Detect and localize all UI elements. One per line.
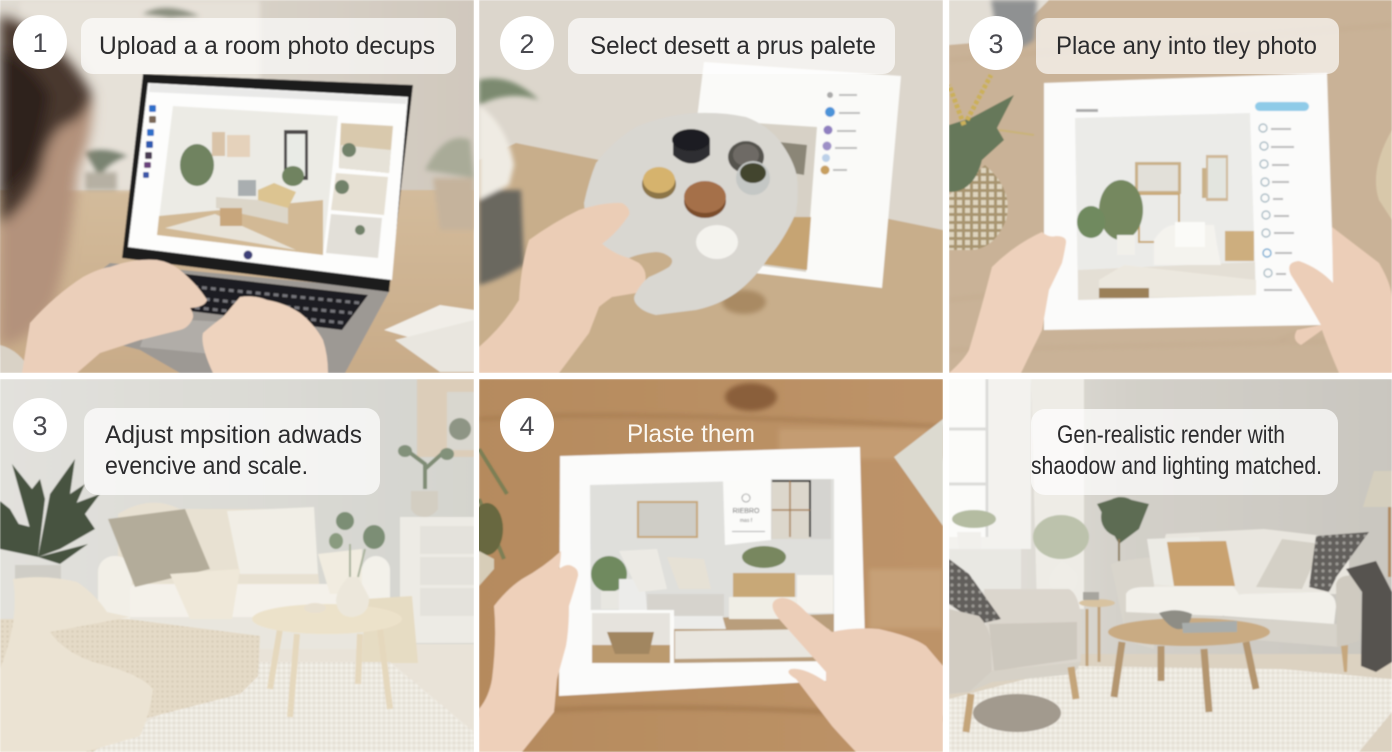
sheet header bbox=[1076, 102, 1309, 112]
white dresser bbox=[400, 517, 474, 643]
book at top right bbox=[894, 419, 943, 526]
paint palette bbox=[584, 113, 798, 315]
blurred background plants and pots bbox=[20, 0, 474, 230]
caption pill bbox=[84, 408, 380, 495]
step number badge bbox=[969, 16, 1023, 70]
round coffee table with bowl and books bbox=[1108, 610, 1270, 712]
scene: person using laptop bbox=[0, 0, 474, 373]
shaggy rug bbox=[949, 666, 1392, 752]
wall background bbox=[0, 0, 474, 200]
step number badge bbox=[13, 15, 67, 69]
step number badge: 3 bbox=[988, 29, 1004, 59]
caption pill bbox=[1031, 409, 1338, 495]
hands on the keyboard bbox=[22, 260, 328, 373]
collage white note card with text: RIEBRO bbox=[733, 508, 760, 515]
scene: hand holding paint palette bbox=[479, 0, 943, 373]
collage basket photo bbox=[590, 610, 674, 665]
grey floor pouf bbox=[973, 694, 1061, 732]
sheet tool list labels bbox=[1264, 128, 1294, 291]
caption pill: Place any into tley photo bbox=[1056, 32, 1317, 60]
collage window photo bbox=[771, 479, 831, 539]
woven basket right bbox=[1376, 130, 1392, 220]
floor lamp bbox=[1363, 471, 1392, 577]
sheet tool list bbox=[1259, 124, 1272, 277]
scene: hands placing collage bbox=[471, 379, 943, 752]
step number badge: 1 bbox=[32, 28, 48, 58]
shoulder bbox=[0, 344, 24, 373]
white heading text: Plaste them bbox=[627, 420, 755, 448]
framed art bbox=[417, 379, 474, 457]
scene: hands holding printed sheet bbox=[949, 0, 1392, 373]
printed sheet bbox=[1044, 73, 1334, 330]
caption pill: evencive and scale. bbox=[105, 452, 308, 480]
caption pill: Upload a a room photo decups bbox=[99, 32, 435, 60]
left hand holding sheet bbox=[479, 551, 578, 752]
hand fingers behind palette bbox=[479, 210, 646, 373]
caption pill: Adjust mpsition adwads bbox=[105, 421, 362, 449]
dark fern plant bbox=[0, 459, 100, 581]
gold paint disc bbox=[642, 167, 676, 199]
plant in pot on dresser bbox=[398, 445, 454, 517]
step number badge: 2 bbox=[519, 29, 535, 59]
cream sofa bbox=[98, 503, 390, 649]
wall background bbox=[479, 0, 943, 230]
laptop app toolbar bbox=[149, 84, 407, 104]
scene: cream living room bbox=[0, 379, 474, 752]
white cloth on desk bbox=[384, 305, 474, 372]
wood knot bbox=[722, 290, 766, 314]
step number badge bbox=[500, 16, 554, 70]
wooden desk bbox=[0, 190, 474, 373]
wooden table background bbox=[479, 379, 943, 752]
armchair legs bbox=[966, 667, 1076, 732]
olive paint pot bbox=[736, 161, 770, 195]
tall plant and white vase bbox=[1033, 497, 1149, 593]
right hand bbox=[1289, 227, 1392, 373]
panel: step 4 paste them bbox=[471, 379, 943, 752]
wood grain and knot bbox=[479, 383, 943, 719]
wood grain bbox=[949, 25, 1392, 350]
laptop lid and screen bbox=[122, 74, 413, 292]
room photo in sheet bbox=[1075, 113, 1256, 300]
laptop upload icon bbox=[244, 250, 252, 260]
step number badge: 3 bbox=[32, 411, 48, 441]
laptop thumbnail column bbox=[326, 123, 393, 258]
caption pill: Select desett a prus palete bbox=[590, 32, 876, 60]
round side table with vase bbox=[252, 512, 402, 717]
step number badge: 4 bbox=[519, 411, 535, 441]
potted plant with woven basket bbox=[949, 75, 1034, 250]
panel: step 1 upload a room photo bbox=[0, 0, 474, 373]
sheet list icons bbox=[820, 92, 860, 174]
plant at left edge bbox=[471, 449, 507, 586]
floor bbox=[0, 644, 474, 752]
small side table bbox=[1079, 592, 1115, 669]
right hand pointing bbox=[772, 598, 943, 752]
panel: step 2 select palette bbox=[479, 0, 943, 373]
floor bbox=[949, 654, 1392, 752]
armchair with patterned cushion bbox=[949, 559, 1081, 694]
wall corner bbox=[949, 0, 1049, 45]
wooden table background bbox=[949, 0, 1392, 373]
panel: step 3 place into photo bbox=[949, 0, 1392, 373]
collage main room photo bbox=[590, 479, 834, 664]
blurred vase with cloth bbox=[479, 78, 539, 285]
grey paint pot bbox=[728, 141, 764, 173]
caption pill bbox=[568, 18, 895, 74]
caption pill bbox=[1036, 18, 1339, 74]
caption pill: Gen-realistic render with bbox=[1057, 421, 1285, 449]
person's head, seen from behind bbox=[0, 15, 92, 345]
caption pill bbox=[81, 18, 456, 74]
step number badge bbox=[500, 398, 554, 452]
panel: step 3 adjust position bbox=[0, 379, 474, 752]
collage white note card with text bbox=[723, 479, 771, 545]
black paint pot bbox=[672, 129, 710, 164]
left hand bbox=[949, 232, 1066, 373]
palette thumb hole bbox=[696, 225, 738, 259]
knit-covered armchair bbox=[0, 577, 260, 752]
laptop room photo bbox=[157, 106, 338, 255]
shaggy rug bbox=[90, 662, 474, 752]
wooden shelf surface bbox=[479, 143, 943, 373]
dark throw blanket bbox=[1346, 561, 1392, 672]
panel: final realistic render bbox=[949, 379, 1392, 752]
thumb over palette bbox=[580, 202, 630, 244]
sofa bbox=[1111, 529, 1392, 672]
sofa pillows bbox=[1147, 532, 1369, 592]
windowsill plant bbox=[952, 510, 996, 549]
paper sheet behind palette bbox=[679, 62, 901, 288]
laptop base and keyboard bbox=[104, 262, 390, 373]
curtain bbox=[1031, 379, 1084, 609]
blurred grey vase bbox=[991, 0, 1037, 49]
laptop sidebar icons bbox=[143, 105, 156, 178]
printed sheet bbox=[559, 447, 866, 696]
caption pill: shaodow and lighting matched. bbox=[1031, 452, 1322, 480]
brown wooden disc bbox=[684, 181, 726, 218]
collage white note card with text: mas f bbox=[740, 518, 753, 524]
scene: finished living room bbox=[949, 379, 1392, 752]
wall background bbox=[949, 379, 1392, 752]
window bbox=[949, 379, 1031, 591]
wall background bbox=[0, 379, 474, 752]
woven pouf bbox=[362, 596, 418, 663]
step number badge bbox=[13, 398, 67, 452]
